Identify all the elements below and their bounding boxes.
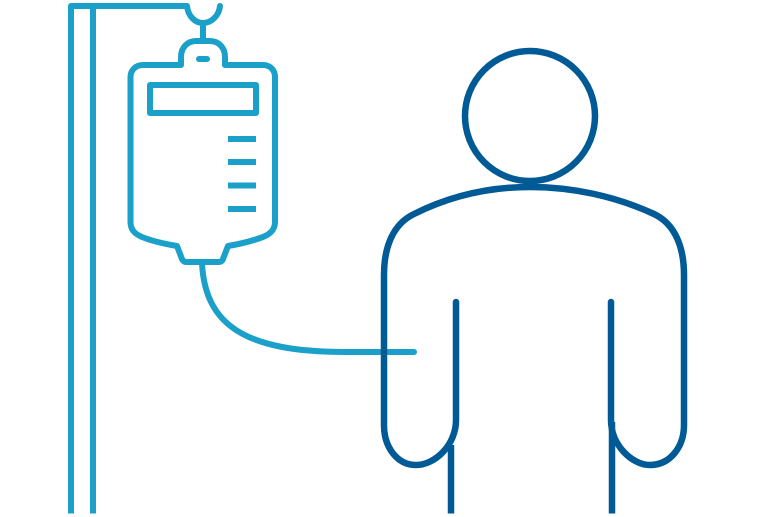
icon: IV bag xyxy=(130,41,275,262)
patient torso and arms xyxy=(384,187,684,465)
bag measurement ticks xyxy=(228,139,256,209)
icon: patient figure xyxy=(384,51,684,514)
bag hanger slot xyxy=(199,56,207,62)
patient head xyxy=(465,51,595,181)
icon: IV pole and hook xyxy=(71,6,220,514)
bag label window xyxy=(150,85,256,113)
patient legs xyxy=(451,422,612,514)
icon: IV tube xyxy=(202,263,414,352)
